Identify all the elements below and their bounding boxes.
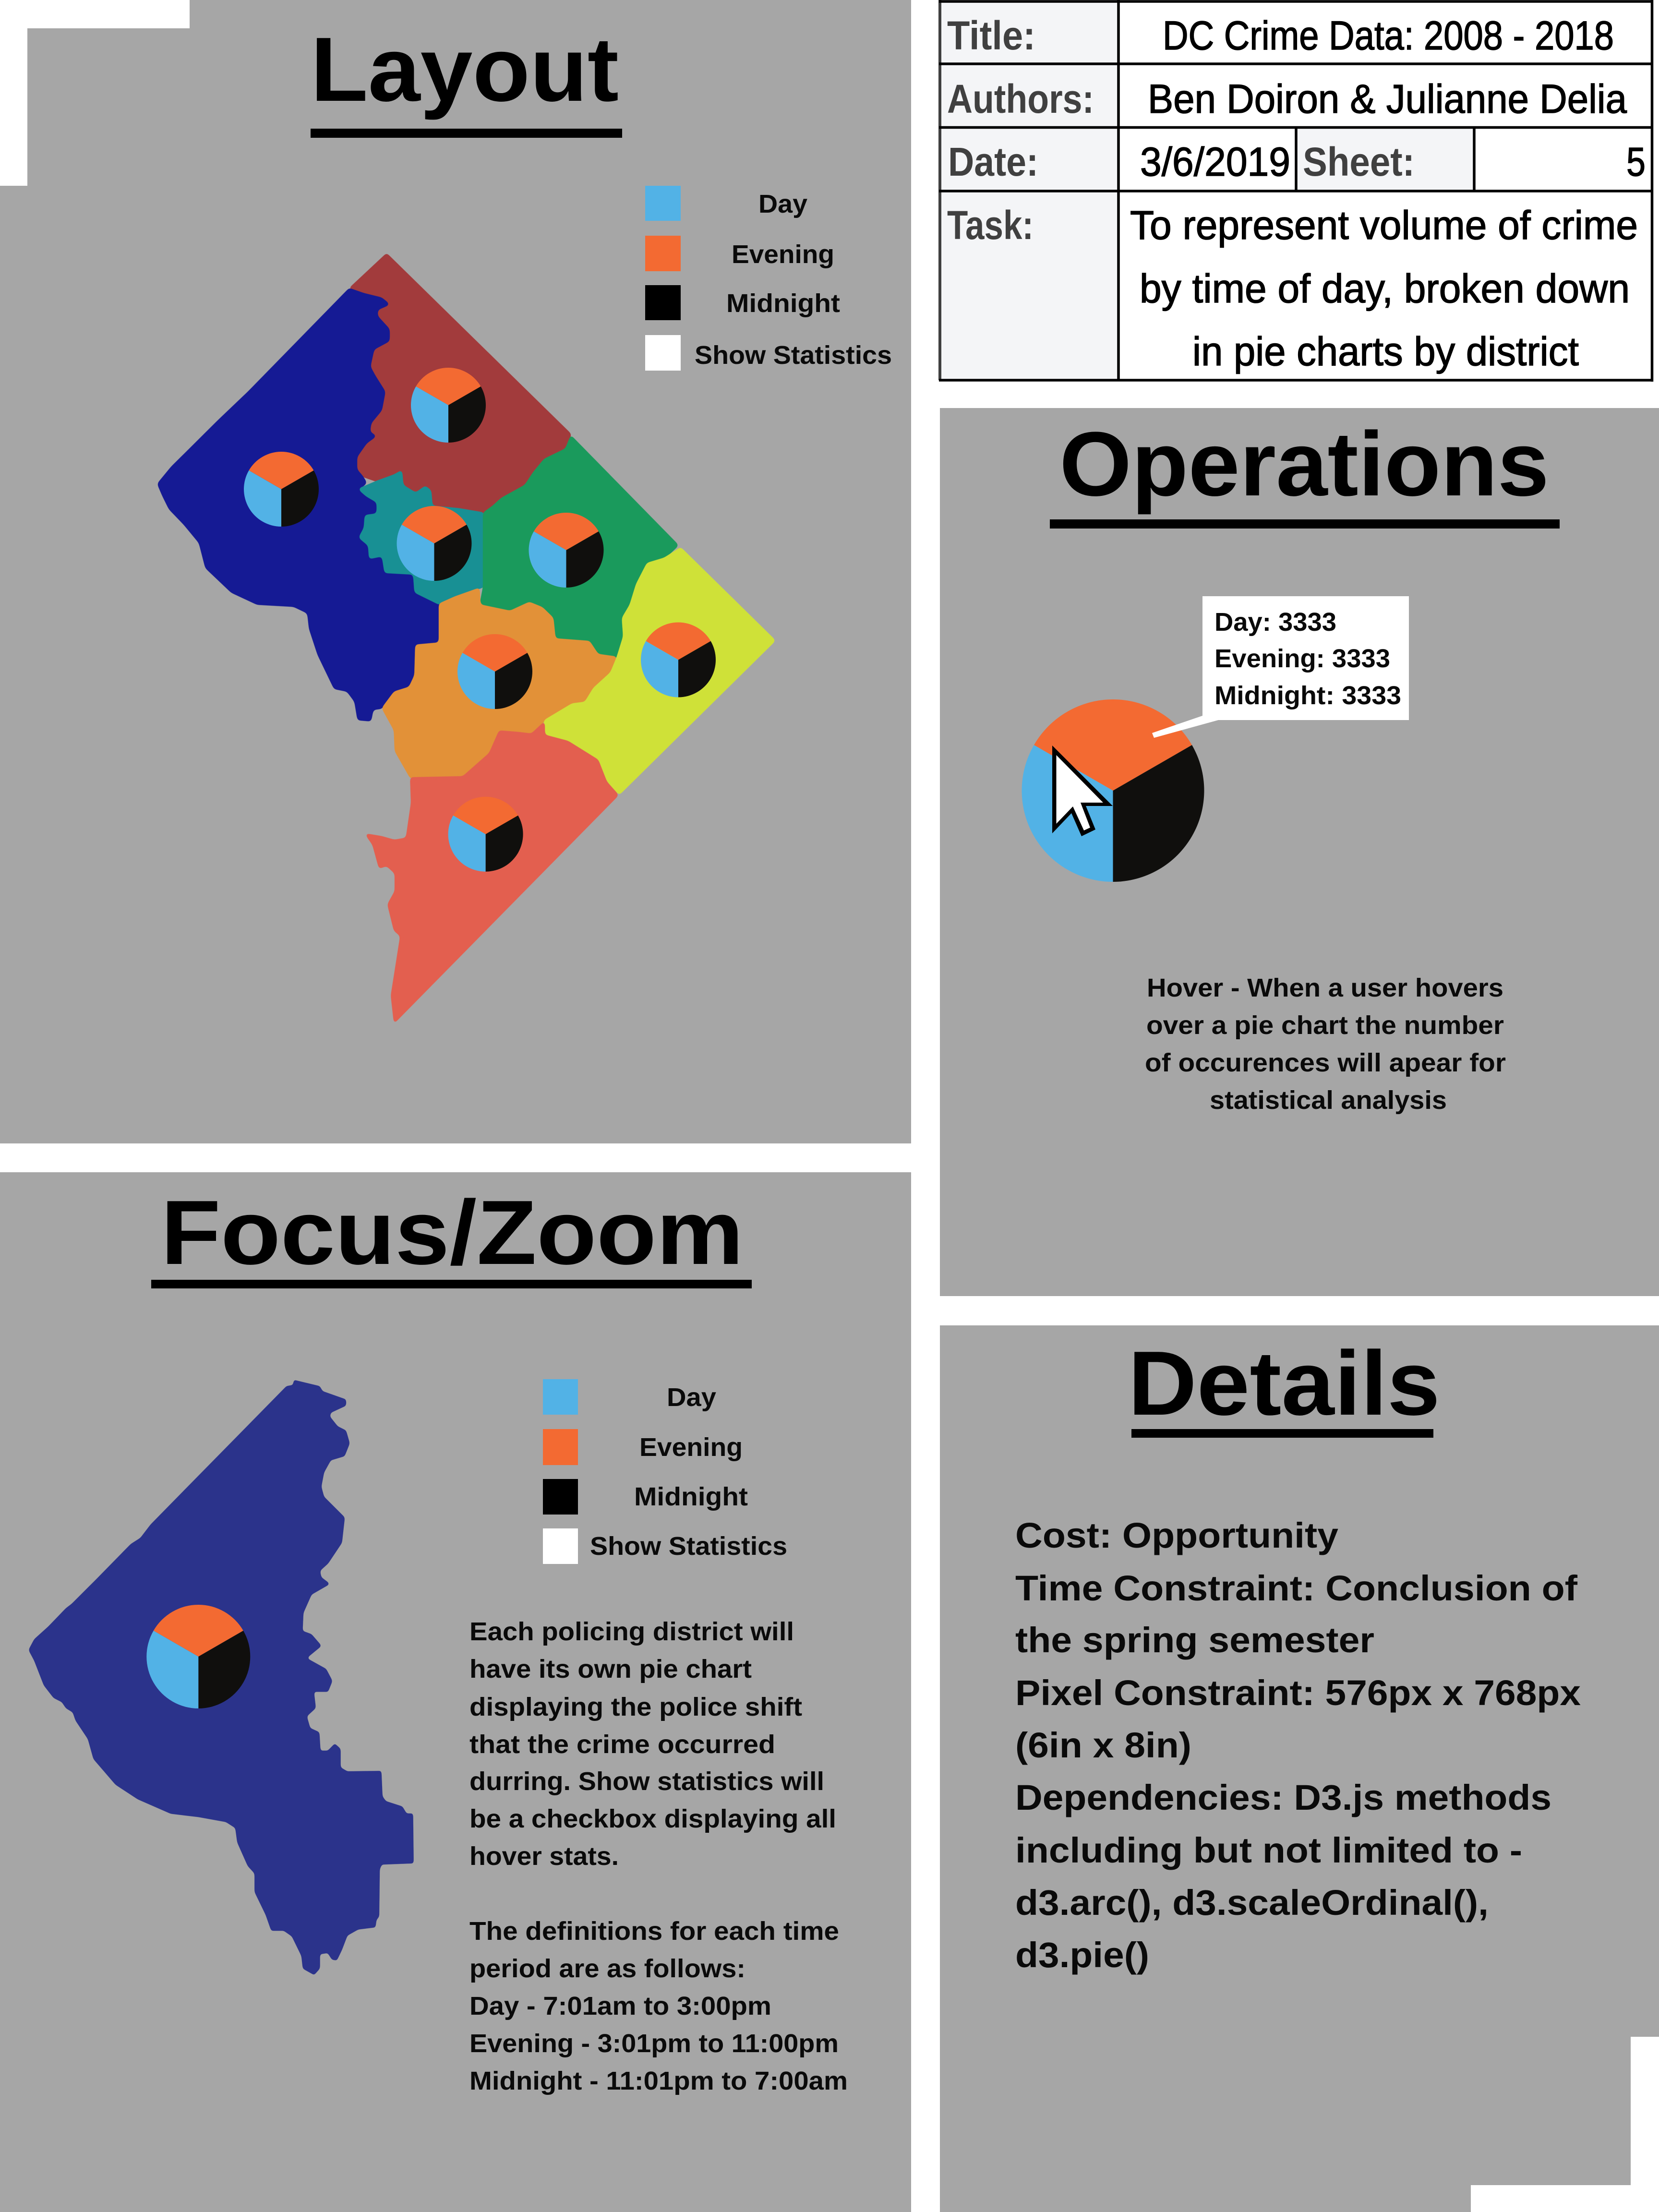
district: yellow — [544, 548, 775, 794]
panel: focus/zoom — [0, 1172, 911, 2212]
text: focus description: The definitions for each time — [469, 1917, 839, 1946]
label: task — [947, 203, 1638, 374]
label: date and sheet: Date: — [948, 139, 1038, 184]
pie: blue district — [244, 452, 319, 527]
pie: hover — [1022, 699, 1204, 882]
district: green — [480, 436, 678, 657]
legend: focus: Day — [667, 1383, 716, 1412]
label: task: To represent volume of crime — [1130, 203, 1638, 248]
text: focus description: displaying the police shift — [469, 1693, 802, 1721]
label: title — [947, 13, 1614, 58]
district: blue — [158, 289, 439, 721]
label: task: by time of day, broken down — [1140, 266, 1630, 311]
text: hover description: statistical analysis — [1210, 1086, 1447, 1115]
text: focus description: hover stats. — [469, 1842, 619, 1871]
table: title block — [939, 0, 1652, 382]
label: title: DC Crime Data: 2008 - 2018 — [1163, 13, 1614, 58]
legend: focus: Midnight — [634, 1482, 748, 1511]
callout: hover statistics: Evening: 3333 — [1214, 644, 1390, 673]
pie: green district — [529, 513, 603, 588]
heading: layout: Layout — [311, 19, 619, 120]
pie: teal district — [397, 506, 471, 581]
legend: layout: Midnight — [726, 289, 840, 318]
pie: orange district — [457, 634, 532, 709]
heading: details: Details — [1128, 1333, 1440, 1434]
text: hover description — [1145, 974, 1506, 1115]
text: focus description: Day - 7:01am to 3:00pm — [469, 1992, 771, 2020]
text: details list: (6in x 8in) — [1015, 1725, 1191, 1765]
pie: maroon district — [411, 368, 486, 443]
map: DC police districts — [158, 254, 775, 1022]
legend: focus — [543, 1379, 787, 1564]
label: authors: Ben Doiron & Julianne Delia — [1148, 76, 1627, 121]
text: focus description: Midnight - 11:01pm to 7:00am — [469, 2067, 848, 2095]
text: focus description: Evening - 3:01pm to 11:00pm — [469, 2029, 839, 2058]
legend: layout: Show Statistics — [695, 341, 892, 370]
legend: layout: Day — [758, 190, 807, 218]
map: single district with pie — [29, 1381, 413, 1974]
pie: focus district — [146, 1605, 250, 1708]
legend: focus: Show Statistics — [590, 1532, 787, 1561]
text: focus description — [469, 1617, 848, 2095]
panel: details — [940, 1325, 1659, 2212]
text: details list — [1015, 1515, 1581, 1975]
text: hover description: Hover - When a user hovers — [1147, 974, 1503, 1002]
text: details list: Pixel Constraint: 576px x 768px — [1015, 1673, 1581, 1713]
district: red — [366, 722, 618, 1022]
text: details list: d3.pie() — [1015, 1935, 1149, 1975]
text: hover description: over a pie chart the number — [1146, 1011, 1504, 1040]
label: task: in pie charts by district — [1192, 329, 1579, 374]
text: focus description: durring. Show statistics will — [469, 1767, 824, 1796]
text: details list: Dependencies: D3.js methods — [1015, 1778, 1551, 1817]
district: orange — [382, 589, 616, 778]
label: authors: Authors: — [947, 76, 1094, 121]
text: details list: d3.arc(), d3.scaleOrdinal(), — [1015, 1883, 1489, 1923]
text: focus description: be a checkbox displaying all — [469, 1804, 836, 1833]
text: details list: the spring semester — [1015, 1620, 1374, 1660]
label: authors — [947, 76, 1627, 121]
pie: yellow district — [641, 623, 716, 697]
label: date and sheet — [948, 139, 1646, 184]
legend: layout: Evening — [732, 240, 834, 269]
icon: mouse cursor — [1052, 745, 1113, 836]
text: hover description: of occurences will apear for — [1145, 1048, 1506, 1077]
district: teal — [359, 471, 483, 604]
label: date and sheet: Sheet: — [1303, 139, 1415, 184]
panel: layout — [0, 0, 911, 1143]
text: focus description: period are as follows: — [469, 1954, 745, 1983]
text: focus description: Each policing district will — [469, 1617, 794, 1646]
text: focus description: that the crime occurred — [469, 1730, 775, 1759]
label: date and sheet: 5 — [1626, 139, 1646, 184]
legend: layout — [645, 186, 892, 371]
text: focus description: have its own pie chart — [469, 1655, 752, 1683]
text: details list: Cost: Opportunity — [1015, 1515, 1338, 1555]
text: details list: including but not limited to - — [1015, 1830, 1522, 1870]
callout: hover statistics: Midnight: 3333 — [1214, 681, 1401, 710]
heading: operations: Operations — [1059, 413, 1549, 515]
heading: focus/zoom: Focus/Zoom — [161, 1182, 744, 1284]
text: details list: Time Constraint: Conclusion of — [1015, 1568, 1577, 1608]
label: task: Task: — [947, 203, 1034, 248]
label: title: Title: — [947, 13, 1035, 58]
callout: hover statistics — [1152, 596, 1409, 738]
pie: red district — [448, 797, 523, 872]
callout: hover statistics: Day: 3333 — [1214, 608, 1336, 637]
district: maroon — [349, 254, 571, 513]
legend: focus: Evening — [639, 1433, 743, 1462]
label: date and sheet: 3/6/2019 — [1140, 139, 1290, 184]
panel: operations — [940, 408, 1659, 1296]
